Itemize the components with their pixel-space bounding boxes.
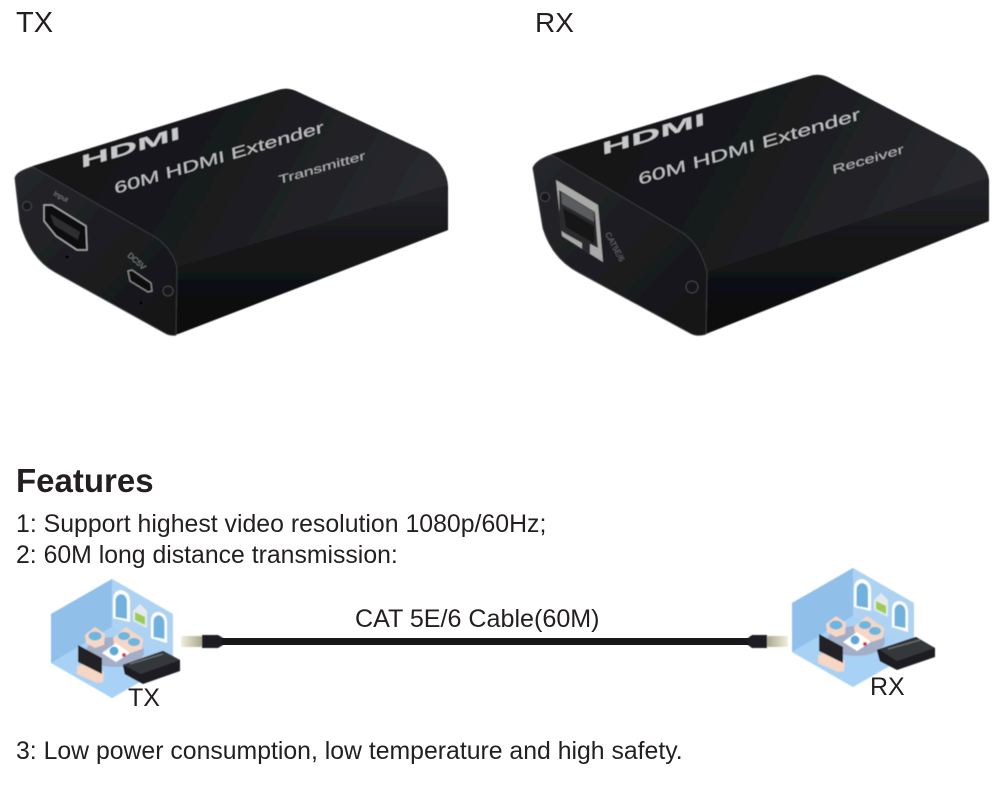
TX room illustration: [51, 579, 173, 698]
feature 3: 3: Low power consumption, low temperature and high safety.: [16, 738, 683, 765]
RX room illustration: [792, 568, 914, 687]
screws: [22, 202, 32, 210]
RX mini device: [877, 637, 935, 670]
HDMI logo: HDMI: [601, 109, 706, 159]
screws: [540, 192, 550, 202]
HDMI port: [44, 205, 87, 250]
cable label: CAT 5E/6 Cable(60M): [355, 605, 600, 633]
receiver label: Receiver: [832, 142, 904, 177]
product photo: TX transmitter: [15, 89, 448, 335]
transmitter label: Transmitter: [278, 150, 366, 187]
TX label: TX: [128, 684, 160, 712]
model label: 60M HDMI Extender: [114, 119, 324, 198]
device body: [533, 75, 989, 335]
model label: 60M HDMI Extender: [637, 105, 862, 189]
HDMI logo: HDMI: [80, 123, 181, 172]
cable: [222, 638, 750, 645]
device body: [15, 89, 448, 335]
micro USB port: [128, 270, 152, 292]
feature 1: 1: Support highest video resolution 1080p/60Hz;: [16, 511, 546, 538]
transmission diagram: [51, 568, 935, 712]
TX heading: TX: [16, 7, 53, 39]
feature 2: 2: 60M long distance transmission:: [16, 542, 398, 569]
product photo: RX receiver: [533, 75, 989, 335]
DC label: DC5V: [126, 251, 148, 272]
port label: CAT5E/6: [603, 231, 626, 264]
RX label: RX: [870, 673, 905, 701]
left plug: [181, 635, 223, 648]
RX heading: RX: [535, 7, 574, 38]
features heading: Features: [16, 462, 154, 499]
TX mini device: [123, 651, 180, 684]
RJ45 port: [556, 180, 603, 262]
right plug: [748, 635, 788, 648]
input label: Input: [52, 191, 69, 204]
